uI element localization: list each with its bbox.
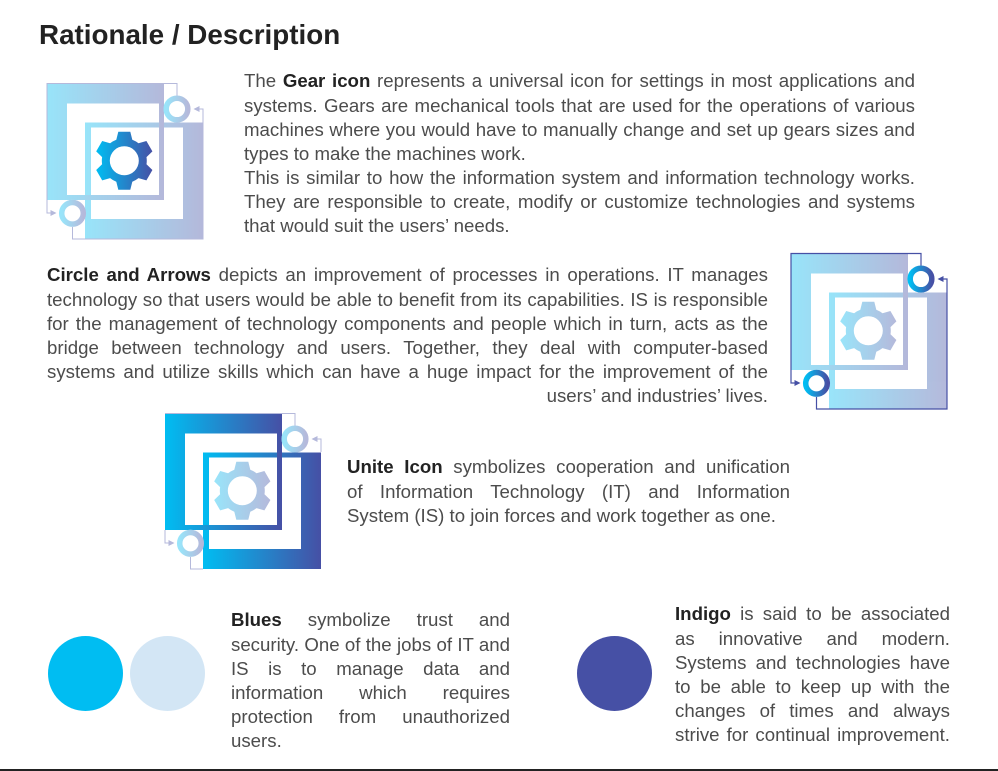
text: circle and arrows description: [47, 264, 768, 406]
icon: circle and arrows emphasis logo: [790, 252, 948, 410]
text: unite icon description: Unite Icon symbolizes cooperation and unification: [347, 456, 790, 477]
text: indigo description: strive for continual improvement.: [675, 724, 950, 745]
text: gear icon description: types to make the machines work.: [244, 143, 526, 164]
text: blues description: protection from unauthorized: [231, 706, 510, 727]
text: indigo description: Systems and technologies have: [675, 652, 950, 673]
text: blues description: information which requires: [231, 682, 510, 703]
text: unite icon description: [347, 456, 790, 526]
text: gear icon description: machines where you would have to manually change and set up gears sizes and: [244, 119, 915, 140]
text: indigo description: as innovative and modern.: [675, 628, 950, 649]
text: circle and arrows description: bridge between technology and users. Together, they deal with computer-based: [47, 337, 768, 358]
text: gear icon description: They are responsible to create, modify or customize technologies and systems: [244, 191, 915, 212]
text: blues description: security. One of the jobs of IT and: [231, 634, 510, 655]
text: unite icon description: of Information Technology (IT) and Information: [347, 481, 790, 502]
swatch: indigo circle: [577, 636, 652, 711]
title: Rationale / Description: [39, 19, 340, 50]
text: blues description: users.: [231, 730, 282, 751]
text: blues description: Blues symbolize trust and: [231, 609, 510, 630]
text: unite icon description: System (IS) to join forces and work together as one.: [347, 505, 776, 526]
text: gear icon description: [244, 70, 915, 236]
text: indigo description: to be able to keep up with the: [675, 676, 950, 697]
icon: gear emphasis logo: [46, 83, 204, 240]
swatch: pale blue circle: [130, 636, 205, 711]
text: circle and arrows description: users’ and industries’ lives.: [547, 385, 768, 406]
text: gear icon description: systems. Gears are mechanical tools that are used for the operations of various: [244, 95, 915, 116]
text: circle and arrows description: systems and utilize skills which can have a huge impact for the improvement of the: [47, 361, 768, 382]
text: circle and arrows description: for the management of technology components and people which in turn, acts as the: [47, 313, 768, 334]
text: indigo description: [675, 603, 950, 745]
icon: unite emphasis logo: [164, 413, 322, 570]
bottom rule: [0, 769, 998, 771]
swatch: bright blue circle: [48, 636, 123, 711]
text: circle and arrows description: Circle and Arrows depicts an improvement of processes in operations. IT manages: [47, 264, 768, 285]
text: indigo description: Indigo is said to be associated: [675, 603, 950, 624]
text: gear icon description: that would suit the users’ needs.: [244, 215, 510, 236]
text: circle and arrows description: technology so that users would be able to benefit from its capabilities. IS is responsible: [47, 289, 768, 310]
text: blues description: [231, 609, 510, 751]
text: blues description: IS is to manage data and: [231, 658, 510, 679]
text: gear icon description: This is similar to how the information system and information technology works.: [244, 167, 915, 188]
text: gear icon description: The Gear icon represents a universal icon for settings in most applications and: [244, 70, 915, 91]
text: indigo description: changes of times and always: [675, 700, 950, 721]
